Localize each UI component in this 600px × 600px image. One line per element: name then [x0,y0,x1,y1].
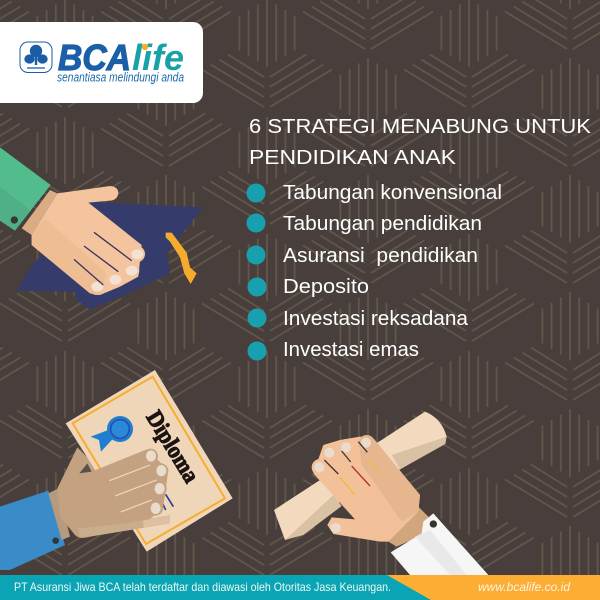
blue sleeve [0,491,65,570]
item 6: Investasi emas [283,338,419,361]
finger gaps [109,465,157,512]
diploma label: Diploma [141,406,204,488]
cuff button [11,216,18,224]
white sleeve [391,513,488,575]
diploma border [73,377,225,544]
wrist [22,190,57,235]
title: PENDIDIKAN ANAK [249,147,457,169]
hand thumb behind paper [57,447,100,493]
wrist [388,507,430,547]
scroll [274,412,447,540]
icon: BCA emblem [20,42,52,72]
graduation cap [17,202,203,309]
fingernails [314,438,371,533]
footer bar [0,575,600,600]
illustration: hand with graduation cap [0,147,203,309]
fingernails [146,450,166,514]
logo wordmark life: life [132,37,184,78]
footer disclaimer: PT Asuransi Jiwa BCA telah terdaftar dan diawasi oleh Otoritas Jasa Keuangan. [14,580,391,594]
diploma paper [66,370,233,552]
cap tassel [166,233,197,284]
cuff button [52,537,59,544]
finger gaps [74,232,132,285]
green sleeve [0,147,51,231]
wrist [48,488,70,540]
item 4 [248,275,369,298]
item 1: Tabungan konvensional [283,181,502,204]
item 5: Investasi reksadana [283,307,469,330]
illustration: hand holding diploma [0,370,233,570]
palm and fingers [57,449,170,538]
logo tagline: senantiasa melindungi anda [57,70,184,84]
hand [32,186,145,295]
strategy list [246,181,502,361]
ribbon seal [91,416,133,452]
title: 6 STRATEGI MENABUNG UNTUK [249,116,592,138]
cuff button [430,520,437,528]
item 4: Deposito [283,275,369,298]
footer website: www.bcalife.co.id [478,580,570,594]
gap shadow [79,463,92,473]
fingernails [91,249,143,292]
logo dot [142,44,148,50]
logo wordmark BCA: BCA [58,37,131,78]
item 2: Tabungan pendidikan [283,212,482,235]
logo panel [0,22,203,103]
title [249,116,592,169]
finger gaps [324,442,367,474]
hand [312,435,420,542]
item 3: Asuransi pendidikan [283,244,478,267]
ribbon lines [159,494,173,510]
illustration: hand holding scroll [274,412,488,575]
